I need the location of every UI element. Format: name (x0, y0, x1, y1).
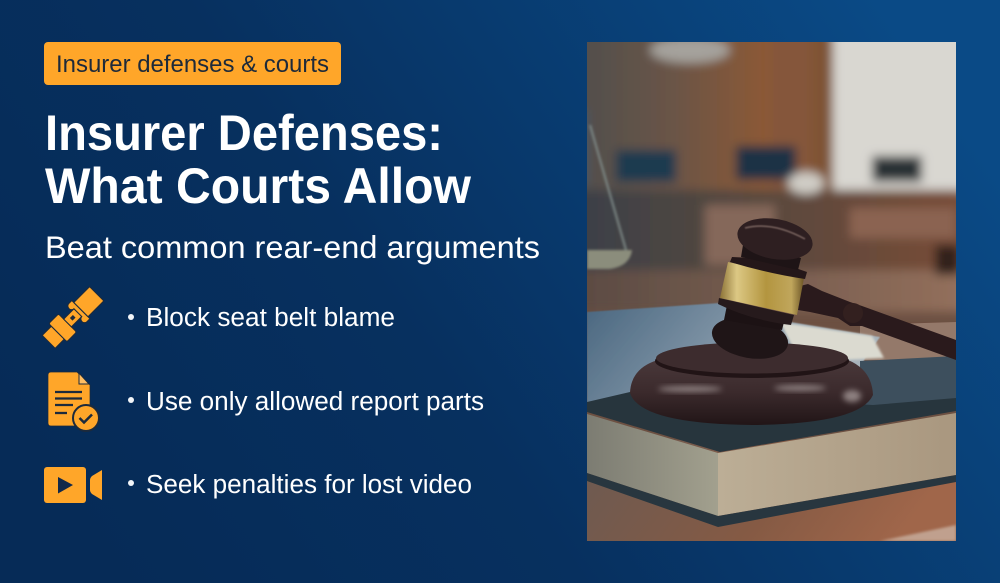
sound block (630, 360, 873, 425)
scale (587, 125, 632, 269)
photo: gavel on law book in courtroom (587, 42, 956, 541)
bullet and label: Block seat belt blame (146, 304, 395, 332)
courtroom backdrop (587, 42, 956, 316)
icon: seat belt buckle (40, 285, 106, 351)
badge: Insurer defenses & courts: Insurer defenses & courts (56, 51, 329, 78)
title: Insurer Defenses: (45, 105, 443, 161)
tabletop behind book (860, 322, 956, 360)
item: seat belt (40, 285, 395, 351)
subtitle: Beat common rear-end arguments (45, 229, 540, 265)
upper flange (730, 257, 807, 279)
brass band (720, 262, 804, 315)
upper cap (737, 218, 812, 260)
item: video (44, 467, 472, 503)
icon: video camera (44, 467, 102, 503)
badge: Insurer defenses & courts (44, 42, 341, 85)
book (587, 392, 956, 452)
paper on book (587, 303, 880, 405)
table (587, 440, 956, 541)
lower cap (712, 320, 788, 359)
gavel head (712, 218, 812, 359)
bullet and label: Seek penalties for lost video (146, 471, 472, 499)
icon: document with check (48, 372, 99, 431)
item: report (48, 372, 484, 431)
gavel handle (798, 284, 956, 360)
title (45, 105, 471, 214)
bullet and label: Use only allowed report parts (146, 388, 484, 416)
title: What Courts Allow (45, 158, 471, 214)
